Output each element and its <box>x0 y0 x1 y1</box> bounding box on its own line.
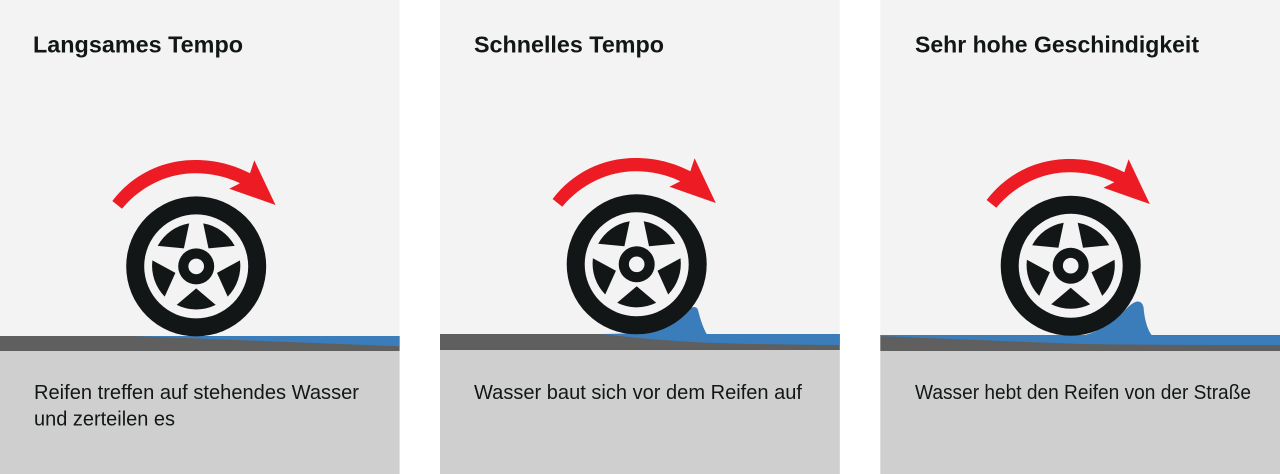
panel background <box>0 0 400 336</box>
panel: Schnelles Tempo <box>440 0 840 474</box>
heading: Sehr hohe Geschindigkeit <box>915 32 1199 58</box>
icon: wheel <box>1001 196 1141 336</box>
panel: Sehr hohe Geschindigkeit <box>880 0 1280 474</box>
heading: Schnelles Tempo <box>474 32 664 58</box>
panel background <box>440 0 840 334</box>
heading: Langsames Tempo <box>33 32 243 58</box>
water layer lifting the tyre <box>880 301 1280 345</box>
icon: rotation arrow <box>553 158 716 207</box>
panel background <box>880 0 1280 335</box>
description: und zerteilen es <box>34 409 175 431</box>
icon: rotation arrow <box>987 159 1150 208</box>
lower text area <box>0 351 400 474</box>
water wedge building up <box>603 307 840 345</box>
road surface <box>440 334 840 350</box>
icon: wheel <box>126 196 266 336</box>
icon: rotation arrow <box>112 160 276 209</box>
description: Wasser baut sich vor dem Reifen auf <box>474 382 802 404</box>
lower text area <box>880 351 1280 474</box>
road surface <box>880 335 1280 351</box>
description: Wasser hebt den Reifen von der Straße <box>915 382 1251 404</box>
panel: Langsames Tempo <box>0 0 400 474</box>
description: Reifen treffen auf stehendes Wasser <box>34 382 359 404</box>
lower text area <box>440 350 840 474</box>
icon: wheel <box>567 194 707 334</box>
road surface <box>0 336 400 351</box>
water film <box>133 336 400 346</box>
description <box>34 382 359 431</box>
